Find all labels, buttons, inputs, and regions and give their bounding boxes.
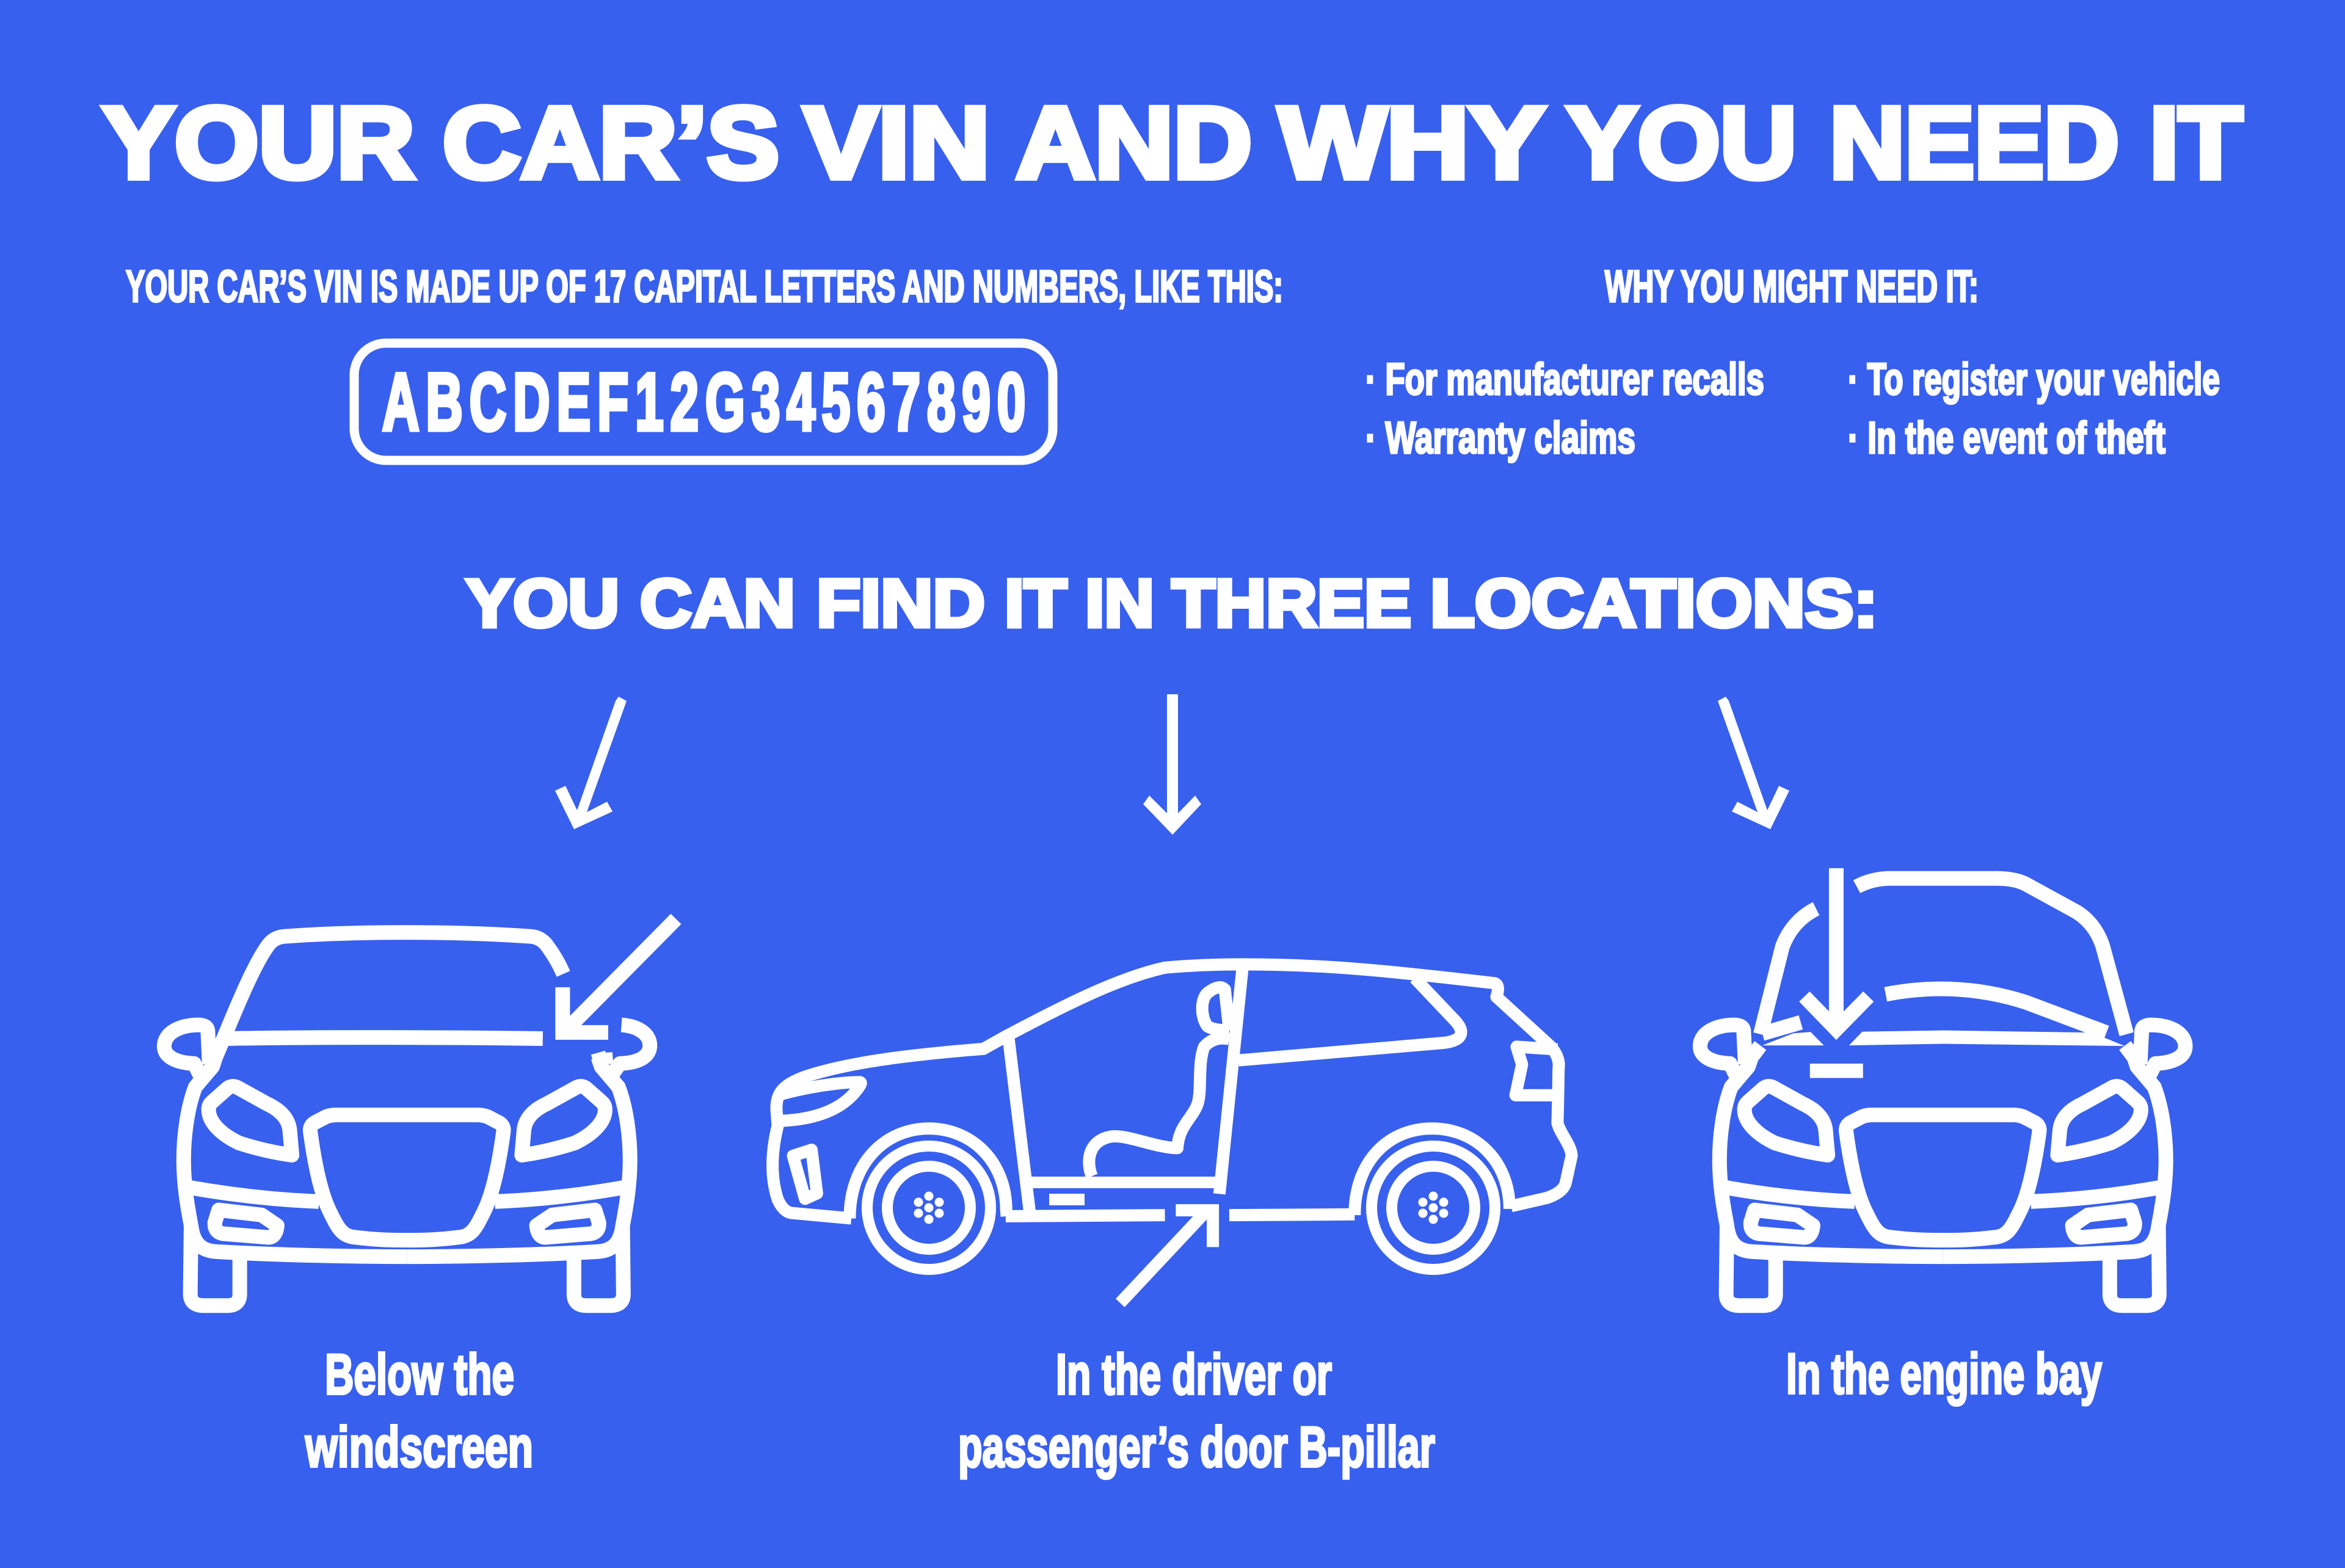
title: YOU [1567, 87, 1797, 200]
rear wheel [1372, 1146, 1495, 1269]
front wheel [867, 1146, 991, 1269]
reasons list: · Warranty claims [1365, 413, 1635, 463]
raised bonnet: left part [1761, 909, 1816, 1034]
left wing mirror [164, 1025, 209, 1079]
section heading [466, 566, 1878, 641]
right wing mirror [2140, 1025, 2186, 1079]
left body half [1720, 1058, 1943, 1305]
reasons list: · For manufacturer recalls [1365, 355, 1764, 404]
caption: below the windscreen [305, 1342, 533, 1479]
door sill plate [1049, 1194, 1085, 1205]
door sill bar [1030, 1177, 1215, 1188]
front wheel arch [849, 1128, 1007, 1219]
caption: below the windscreen: Below the [325, 1342, 514, 1406]
windscreen and roof [216, 932, 564, 1058]
section heading: THREE [1172, 566, 1411, 641]
raised bonnet: right part [1857, 879, 2126, 1034]
sill left of arrow [1006, 1215, 1165, 1216]
caption: door B-pillar: passenger’s door B-pillar [958, 1415, 1435, 1479]
right wing mirror [612, 1025, 650, 1075]
right body half [1943, 1058, 2166, 1305]
caption: engine bay: In the engine bay [1786, 1341, 2102, 1406]
hood line right [1849, 1031, 2125, 1046]
left pillar stub [1751, 1045, 1761, 1058]
title: VIN [804, 87, 990, 200]
sill right of arrow [1229, 1214, 1354, 1215]
car side: door open [773, 964, 1572, 1303]
title: YOUR [103, 87, 415, 200]
right pillar stub [598, 1053, 606, 1067]
left wing mirror [1700, 1025, 1745, 1079]
raised bonnet and arrow [1761, 868, 2126, 1078]
section heading: FIND [816, 566, 985, 641]
left body half [184, 1058, 407, 1305]
seat headrest [1202, 987, 1229, 1030]
title: CAR’S [443, 87, 779, 200]
B pillar [1220, 970, 1242, 1194]
title: AND [1016, 87, 1252, 200]
title: NEED [1830, 87, 2119, 200]
title: IT [2150, 87, 2242, 200]
car front: windscreen [164, 919, 676, 1305]
heading: why you might need it: WHY YOU MIGHT NEED IT: [1605, 262, 1979, 311]
headlight [780, 1082, 861, 1121]
arrow: pointing at windscreen corner [562, 919, 676, 1033]
tail light [1516, 1047, 1557, 1095]
heading: VIN format: YOUR CAR’S VIN IS MADE UP OF 17 CAPITAL LETTERS AND NUMBERS, LIKE THIS: [126, 262, 1283, 311]
reasons list [1365, 355, 2220, 463]
section heading: LOCATIONS: [1430, 566, 1878, 641]
arrow: to windscreen location [555, 697, 627, 829]
front fog lamp [793, 1150, 817, 1199]
caption: door B-pillar: In the driver or [1056, 1342, 1332, 1406]
section heading: IT [1005, 566, 1067, 641]
seat back and cushion [1089, 1039, 1229, 1176]
hood line left [1762, 1032, 1824, 1045]
caption: below the windscreen: windscreen [305, 1415, 533, 1479]
title: WHY [1279, 87, 1545, 200]
bonnet line [225, 1037, 543, 1039]
caption: door B-pillar [958, 1342, 1435, 1479]
rear side window [1238, 978, 1461, 1061]
arrow: to engine bay location [1718, 697, 1789, 829]
arrow: to door location [1143, 694, 1201, 835]
arrow: pointing at door pillar [1120, 1210, 1213, 1303]
car front: engine bay [1700, 1025, 2186, 1305]
reasons list: · In the event of theft [1848, 413, 2165, 463]
VIN plate marker [1810, 1064, 1863, 1078]
windscreen wedge [1762, 1022, 1801, 1034]
section heading: IN [1085, 566, 1154, 641]
rear wheel arch [1354, 1128, 1510, 1215]
front bumper [773, 1112, 851, 1219]
body outline: bonnet, roof and rear [776, 964, 1572, 1206]
A pillar [1008, 1037, 1030, 1211]
section heading: CAN [640, 566, 795, 641]
right body half [407, 1058, 630, 1305]
windscreen arc [1886, 989, 2106, 1033]
arrow: pointing into engine bay [1805, 868, 1869, 1029]
grille [1846, 1115, 2040, 1240]
grille [310, 1115, 504, 1240]
section heading: YOU [466, 566, 619, 641]
example VIN plate: ABCDEF12G34567890 [382, 356, 1025, 448]
title [103, 87, 2242, 200]
right pillar stub [2125, 1045, 2134, 1058]
